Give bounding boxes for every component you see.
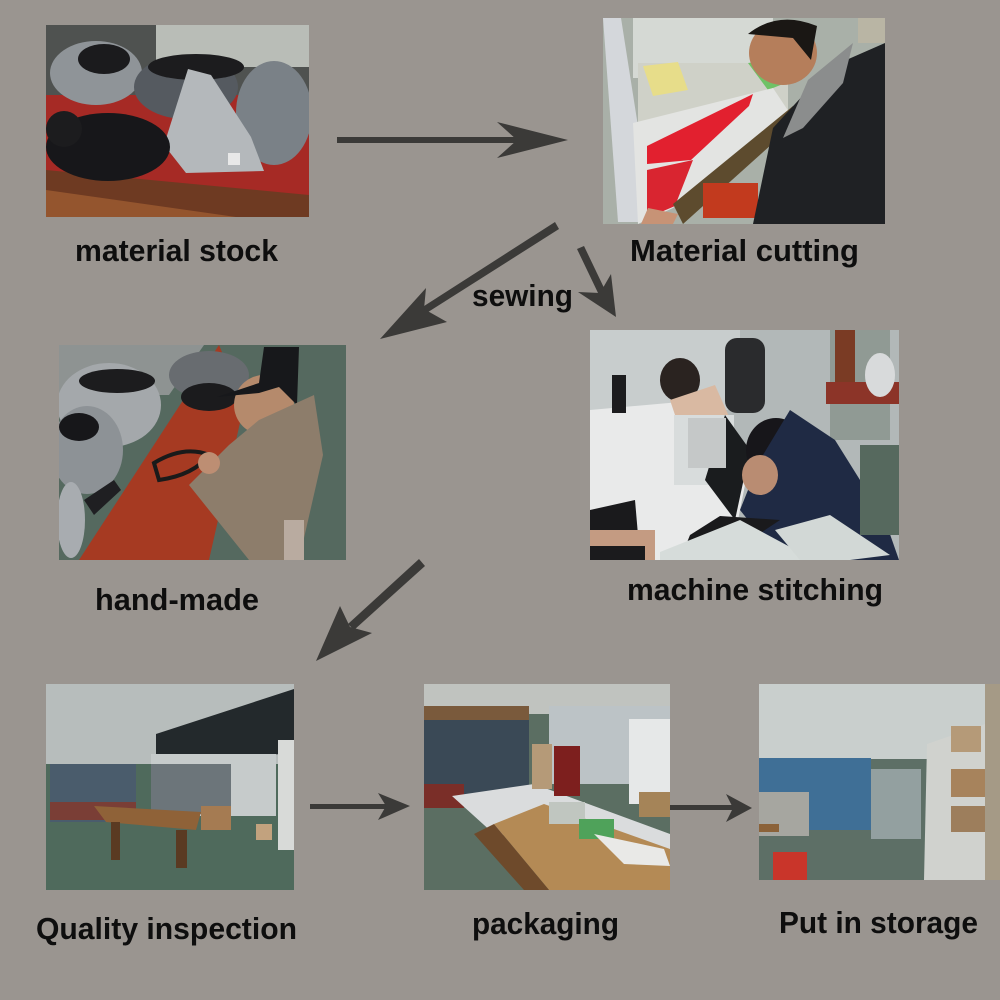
arrow: cutting to hand-made	[380, 222, 559, 339]
label: sewing: sewing	[472, 278, 573, 313]
label: Put in storage: Put in storage	[779, 905, 978, 940]
photo: put in storage	[759, 684, 1000, 880]
arrow: stock to cutting	[337, 122, 568, 158]
photo: quality inspection	[46, 684, 294, 890]
photo: hand-made	[59, 345, 346, 560]
photo: packaging	[424, 684, 670, 890]
arrow: inspection to packaging	[310, 793, 410, 820]
arrow: stitching to quality inspection	[316, 559, 425, 661]
arrow: packaging to storage	[670, 794, 752, 822]
photo: machine stitching	[590, 330, 899, 560]
label: machine stitching: machine stitching	[627, 572, 883, 607]
photo: material stock	[46, 25, 309, 217]
label: material stock: material stock	[75, 233, 279, 268]
label: packaging: packaging	[472, 906, 619, 941]
label: Material cutting: Material cutting	[630, 233, 859, 268]
arrow: cutting to machine stitching	[577, 246, 616, 317]
label: hand-made: hand-made	[95, 582, 259, 617]
label: Quality inspection: Quality inspection	[36, 911, 297, 946]
photo: material cutting	[603, 18, 885, 224]
